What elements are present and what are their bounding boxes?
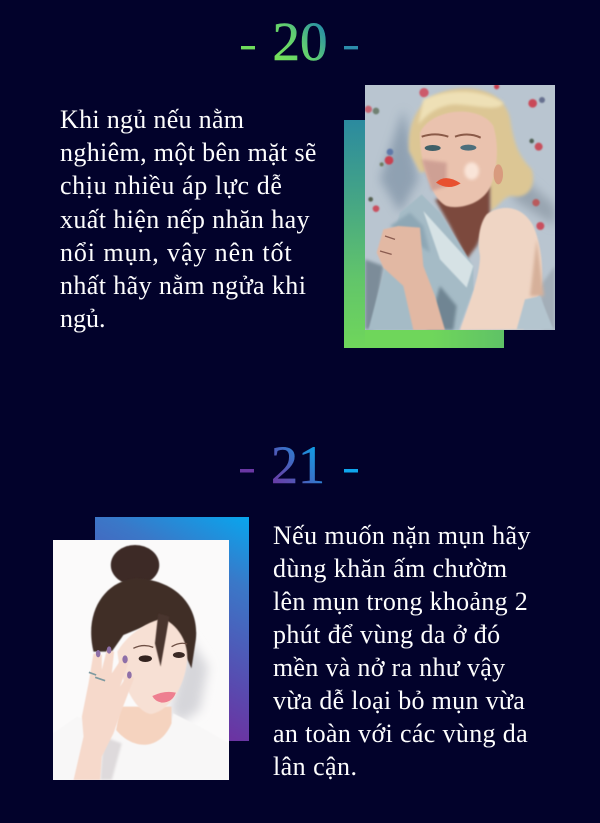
hair bun (111, 545, 159, 585)
gradient frame behind photo 20 (344, 120, 504, 348)
text block: tip 21: dùng khăn ấm chườm (273, 554, 508, 582)
flowers (365, 84, 545, 230)
face (420, 112, 497, 207)
text block: tip 20: chịu nhiều áp lực dễ (60, 171, 282, 200)
bed sheet folds (368, 194, 473, 330)
text block: tip 21: mền và nở ra như vậy (273, 652, 505, 682)
text block: tip 20: nghiêm, một bên mặt sẽ (60, 138, 317, 167)
text block: tip 21: Nếu muốn nặn mụn hãy (273, 520, 531, 550)
floral sheet background (365, 85, 555, 330)
text block: tip 20: Khi ngủ nếu nằm (60, 105, 244, 134)
white t-shirt (173, 714, 187, 723)
hand and forearm (377, 226, 445, 330)
photo: woman with hair bun (53, 540, 229, 780)
text block: tip 21: lân cận. (273, 752, 357, 780)
text block: tip 21 (273, 520, 531, 780)
text block: tip 21: an toàn với các vùng da (273, 718, 528, 748)
text block: tip 21: vừa dễ loại bỏ mụn vừa (273, 686, 525, 714)
hand (74, 650, 134, 780)
hair (409, 88, 533, 211)
nails and rings (96, 646, 132, 679)
text block: tip 20: nổi mụn, vậy nên tốt (60, 238, 292, 267)
text block: tip 21: lên mụn trong khoảng 2 (273, 586, 528, 616)
text block: tip 20: nhất hãy nằm ngửa khi (60, 271, 306, 300)
neck (435, 186, 490, 259)
neck (116, 707, 172, 745)
arm and shoulder (460, 208, 542, 330)
gradient frame behind photo 21 (95, 517, 249, 741)
white backdrop (53, 540, 229, 780)
text block: tip 21: phút để vùng da ở đó (273, 620, 501, 648)
face (117, 618, 187, 714)
heading: number 21 (240, 437, 358, 493)
text block: tip 20 (60, 105, 317, 333)
text block: tip 20: ngủ. (60, 304, 106, 333)
heading: number 20 (241, 12, 358, 70)
hair (91, 578, 196, 668)
text block: tip 20: xuất hiện nếp nhăn hay (60, 205, 310, 234)
photo: woman lying on floral sheets (365, 85, 555, 330)
eyes and lips (139, 655, 152, 662)
eyes and lips (422, 134, 448, 137)
